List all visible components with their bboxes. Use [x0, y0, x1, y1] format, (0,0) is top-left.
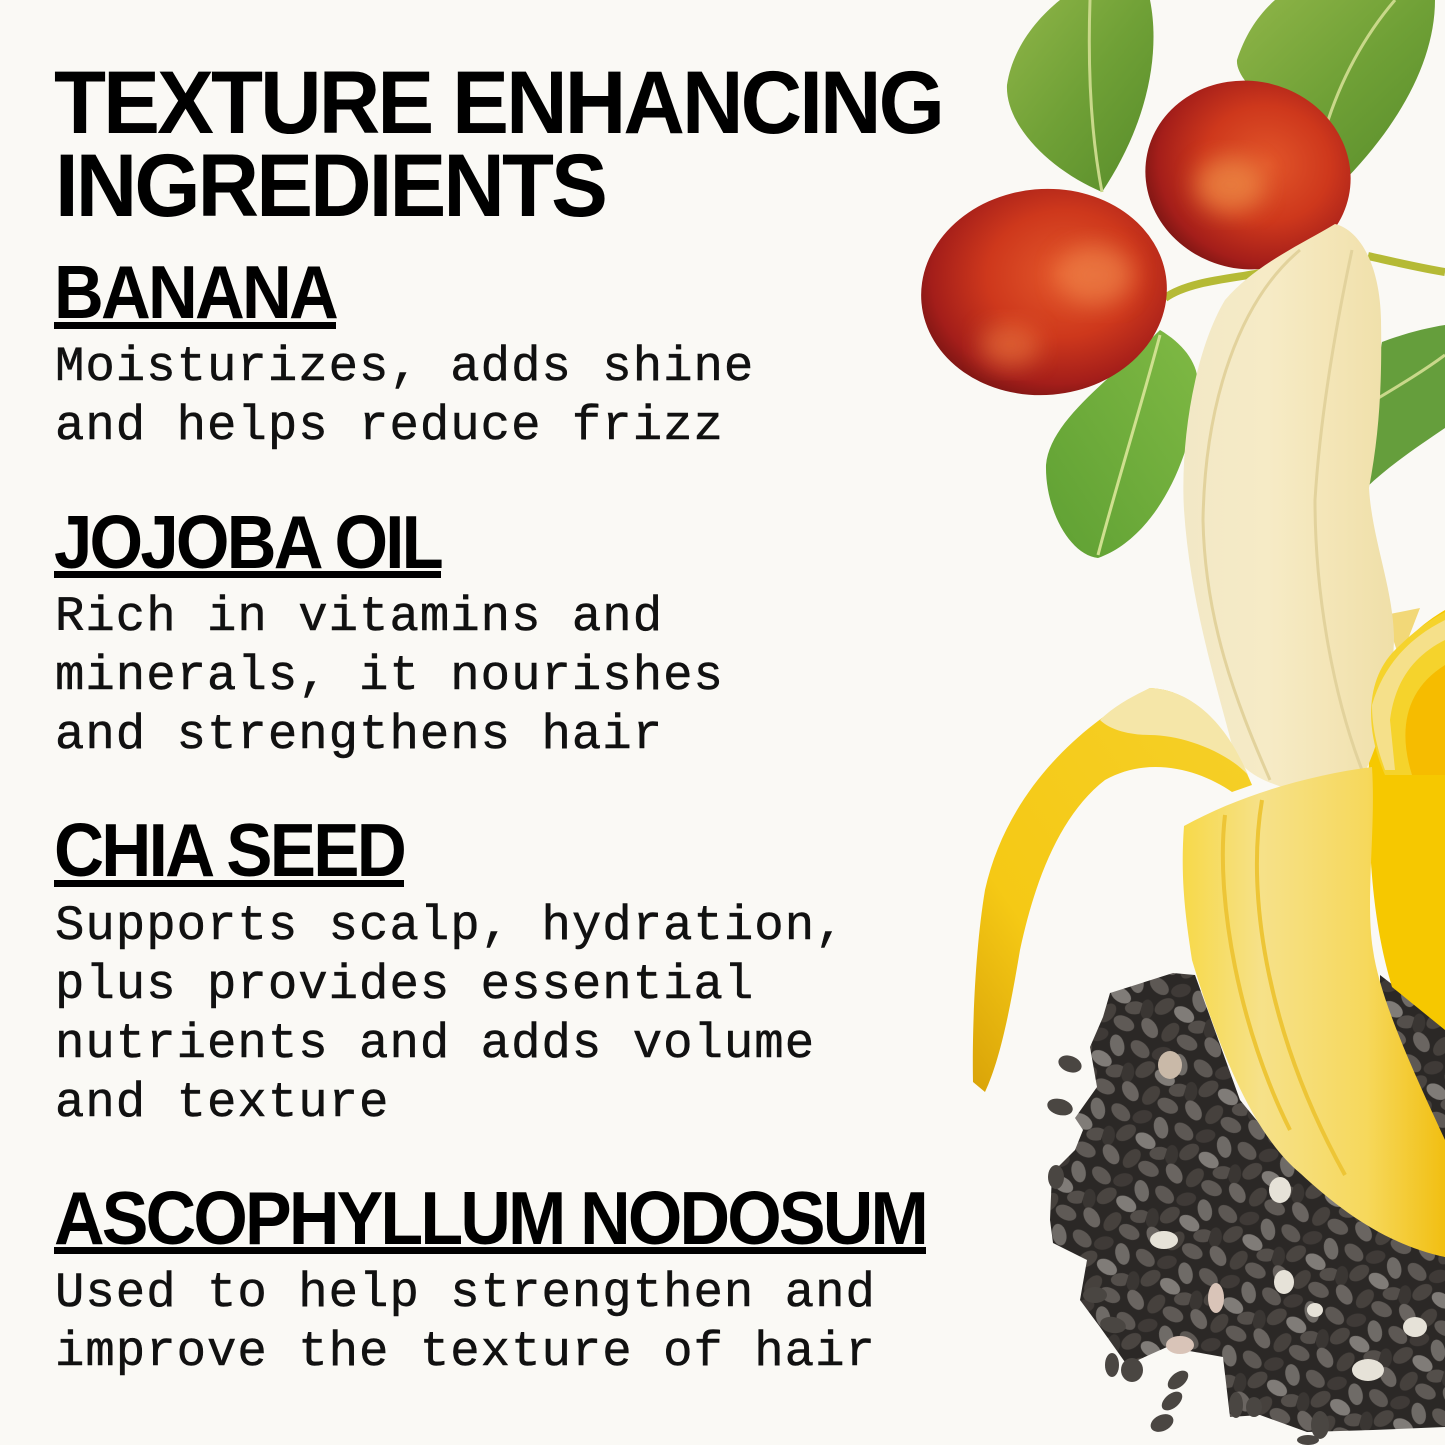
- heading: banana: BANANA: [54, 250, 338, 334]
- section: ascophyllum nodosum: [54, 1176, 926, 1380]
- title: INGREDIENTS: [55, 135, 605, 235]
- text: ascophyllum description: improve the texture of hair: [55, 1324, 876, 1380]
- section: jojoba oil: [54, 500, 724, 763]
- title: TEXTURE ENHANCING: [54, 52, 942, 152]
- banana: small peel behind: [1385, 608, 1420, 660]
- chia seeds: scattered: [1045, 1052, 1329, 1445]
- title: [54, 52, 942, 235]
- text: jojoba description: minerals, it nourishes: [55, 648, 724, 704]
- text: chia description: nutrients and adds volume: [55, 1016, 815, 1072]
- heading: ascophyllum nodosum: ASCOPHYLLUM NODOSUM: [54, 1176, 926, 1260]
- heading: jojoba oil: JOJOBA OIL: [54, 500, 442, 584]
- text: banana description: Moisturizes, adds shine: [55, 339, 754, 395]
- banana: inner golden peel: [1369, 610, 1445, 1030]
- chia seeds: white: [1150, 1051, 1427, 1381]
- banana: front peel: [1183, 767, 1445, 1257]
- text: banana description: and helps reduce frizz: [55, 398, 724, 454]
- banana: left peel: [973, 688, 1252, 1092]
- leaf: top right: [1237, 0, 1435, 185]
- leaf: top left: [1007, 0, 1154, 192]
- chia seed mound: [1040, 960, 1445, 1445]
- leaf: middle: [1046, 330, 1198, 558]
- illustration: ingredients: [912, 0, 1445, 1445]
- text: chia description: and texture: [55, 1075, 389, 1131]
- text: banana description: [55, 339, 754, 454]
- fruit: right jujube: [1145, 80, 1351, 270]
- text: ascophyllum description: Used to help strengthen and: [55, 1265, 876, 1321]
- text: ascophyllum description: [55, 1265, 876, 1380]
- text: jojoba description: [55, 589, 724, 763]
- banana: flesh: [1183, 224, 1394, 788]
- banana: right peel: [1371, 612, 1445, 775]
- stem: [1165, 256, 1445, 298]
- text: jojoba description: Rich in vitamins and: [55, 589, 663, 645]
- text: chia description: Supports scalp, hydration,: [55, 898, 846, 954]
- text: jojoba description: and strengthens hair: [55, 707, 663, 763]
- section: banana: [54, 250, 754, 454]
- fruit: left jujube: [921, 188, 1167, 396]
- leaf: right: [1367, 325, 1445, 487]
- text: chia description: [55, 898, 846, 1131]
- text: chia description: plus provides essential: [55, 957, 754, 1013]
- heading: chia seed: CHIA SEED: [54, 808, 405, 892]
- section: chia seed: [54, 808, 846, 1131]
